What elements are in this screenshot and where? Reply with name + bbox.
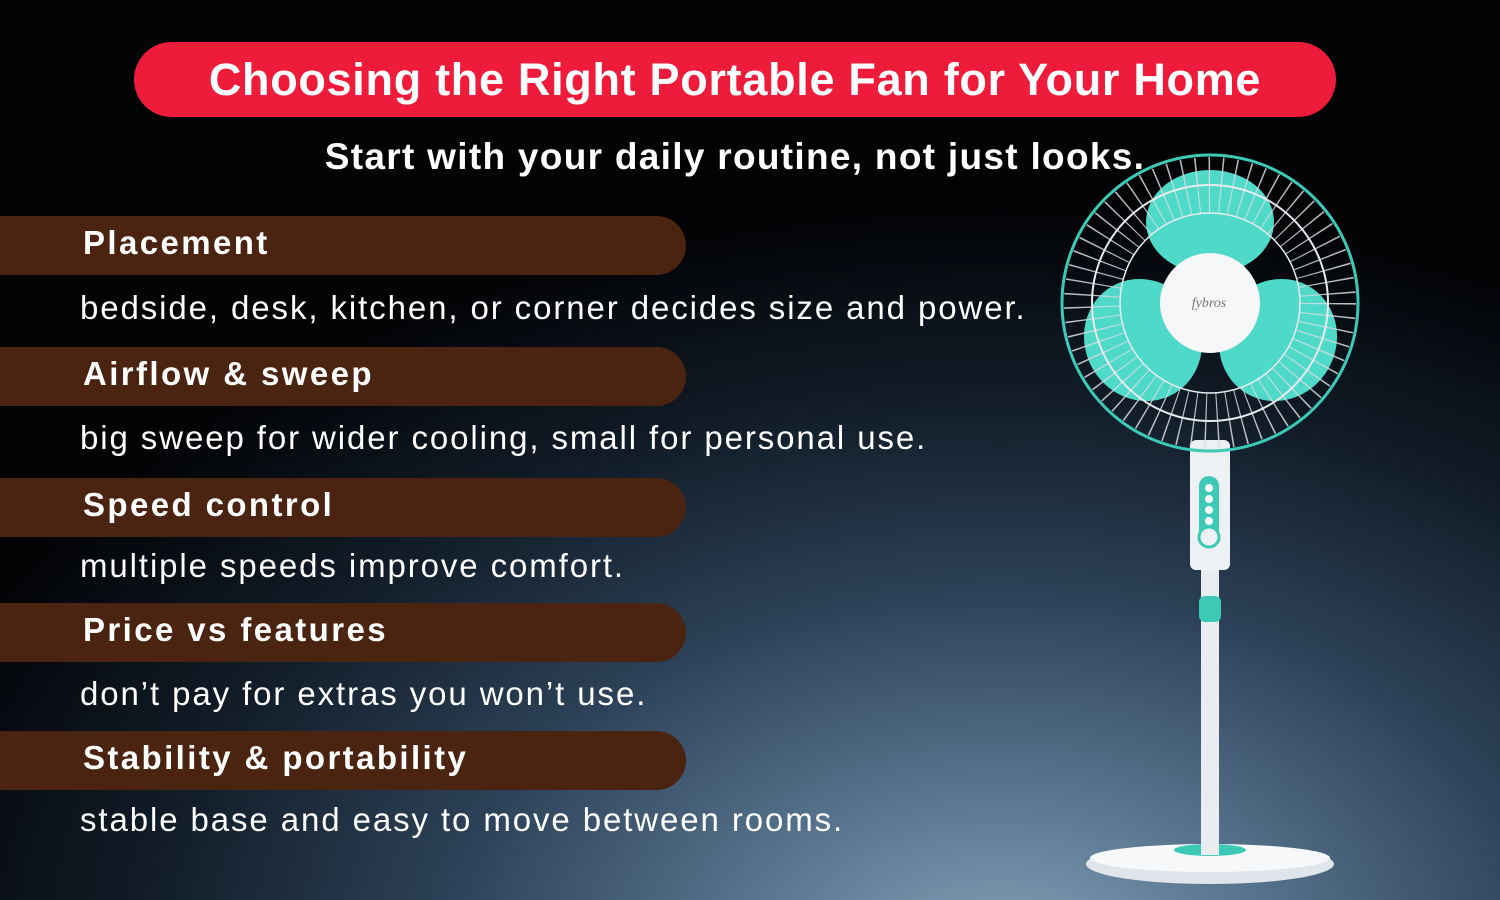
- heading: airflow: [0, 347, 686, 406]
- grille: [1062, 155, 1358, 451]
- heading: price: [0, 603, 686, 662]
- title: [134, 42, 1336, 117]
- heading: stability: [0, 731, 686, 790]
- hub with logo: [1160, 253, 1260, 353]
- control body: [1190, 440, 1230, 570]
- hub with logo: fybros: [1192, 296, 1227, 311]
- heading: price: Price vs features: [83, 611, 388, 648]
- heading: stability: Stability & portability: [83, 739, 468, 776]
- heading: airflow: Airflow & sweep: [83, 355, 374, 392]
- text: placement: bedside, desk, kitchen, or corner decides size and power.: [80, 289, 1027, 326]
- base: [1086, 844, 1334, 884]
- text: speed: multiple speeds improve comfort.: [80, 547, 625, 584]
- subtitle: Start with your daily routine, not just looks.: [325, 136, 1145, 177]
- text: airflow: big sweep for wider cooling, small for personal use.: [80, 419, 927, 456]
- text: price: don’t pay for extras you won’t use.: [80, 675, 647, 712]
- heading: placement: Placement: [83, 224, 270, 261]
- pole: [1199, 560, 1221, 855]
- text: stability: stable base and easy to move between rooms.: [80, 801, 844, 838]
- heading: speed: Speed control: [83, 486, 334, 523]
- heading: speed: [0, 478, 686, 537]
- heading: placement: [0, 216, 686, 275]
- title: Choosing the Right Portable Fan for Your Home: [209, 54, 1261, 105]
- blades: [1062, 170, 1359, 423]
- illustration: pedestal fan: [1060, 154, 1360, 884]
